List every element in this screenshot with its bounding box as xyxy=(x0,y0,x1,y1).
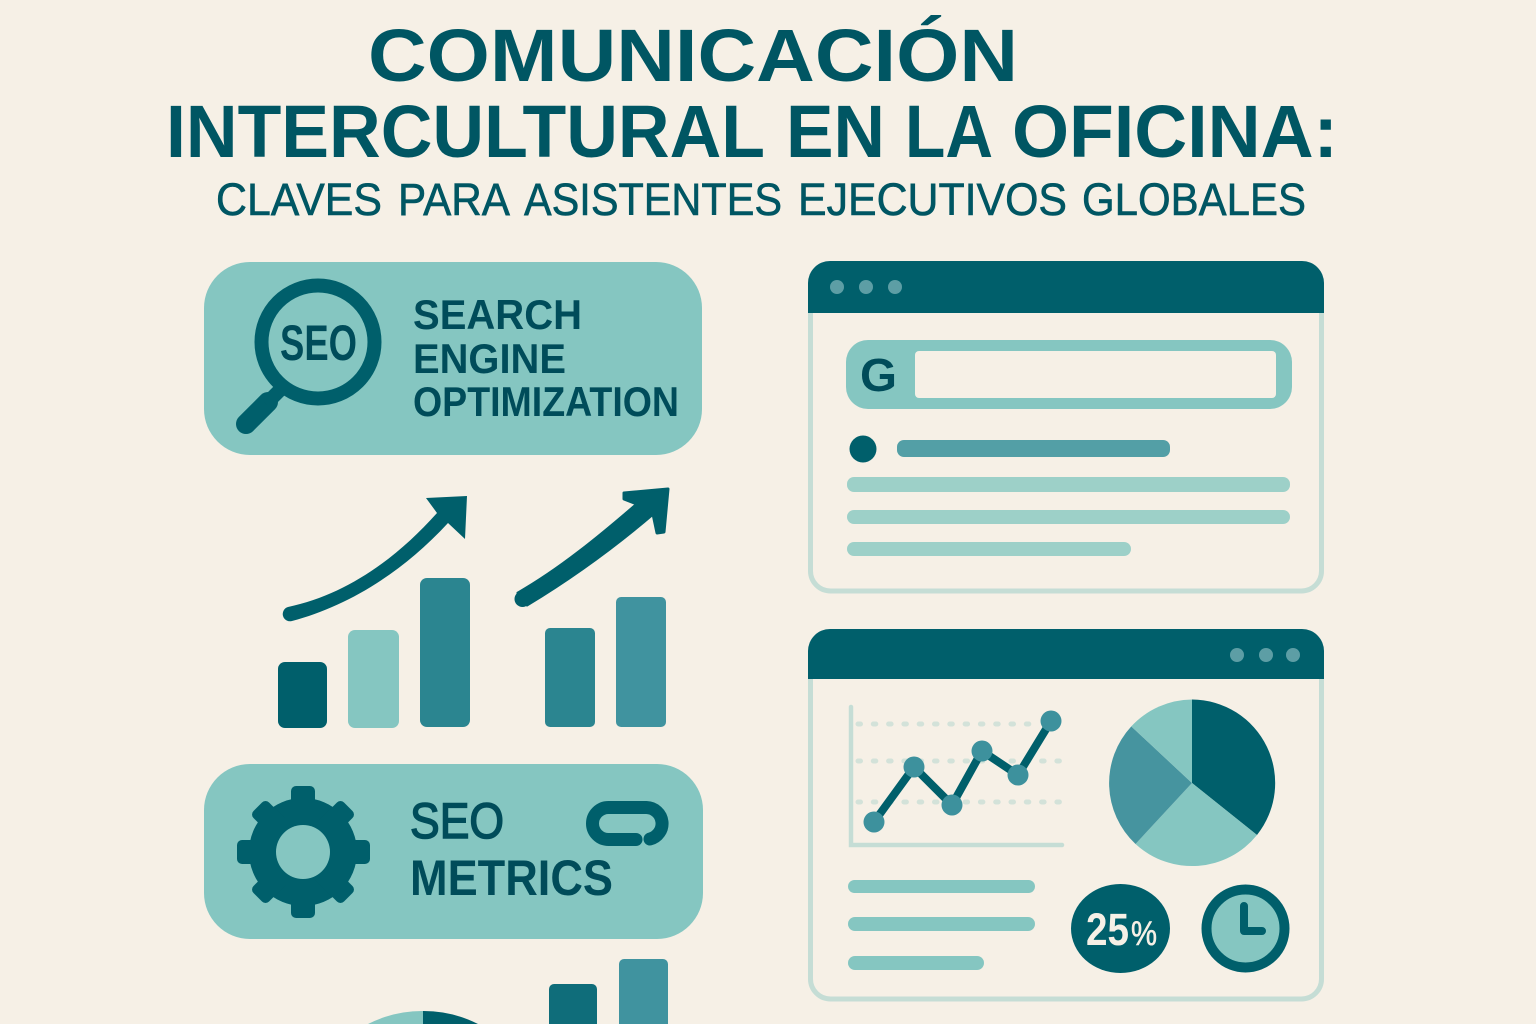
search bar xyxy=(846,340,1292,409)
search result lines xyxy=(847,436,1290,556)
panel: browser analytics window xyxy=(808,629,1324,999)
badge: 25 percent xyxy=(1071,884,1170,973)
icon: clock xyxy=(1206,890,1284,968)
arrow: right growth xyxy=(514,489,668,607)
browser header xyxy=(808,261,1324,313)
icon: magnifying glass with SEO xyxy=(246,286,374,424)
panel: SEO metrics xyxy=(204,764,703,939)
line chart xyxy=(851,707,1062,845)
title line 1: COMUNICACIÓN xyxy=(368,14,1018,97)
panel text: METRICS xyxy=(410,850,613,906)
icon: gear xyxy=(237,786,370,918)
title block xyxy=(166,14,1338,225)
browser header xyxy=(808,629,1324,679)
subtitle: EJECUTIVOS xyxy=(798,174,1067,225)
pie chart xyxy=(1109,700,1275,866)
title line 2: OFICINA: xyxy=(1012,90,1338,173)
text placeholder lines xyxy=(848,880,1035,970)
arrow: left growth xyxy=(283,496,467,621)
panel: browser search window xyxy=(808,261,1324,591)
subtitle xyxy=(216,174,1306,225)
title line 2: LA xyxy=(905,90,993,173)
panel text: SEO xyxy=(410,793,504,849)
subtitle: GLOBALES xyxy=(1082,174,1306,225)
title line 2: EN xyxy=(786,90,885,173)
panel text xyxy=(410,793,613,906)
panel text xyxy=(413,291,679,425)
badge: 25 percent: 25 xyxy=(1086,904,1129,955)
icon: magnifying glass with SEO: SEO xyxy=(280,315,357,371)
panel text: OPTIMIZATION xyxy=(413,378,679,425)
partial pie and bars at bottom edge xyxy=(368,959,668,1024)
search bar: G xyxy=(860,349,897,401)
subtitle: CLAVES xyxy=(216,174,382,225)
bar chart with growth arrows xyxy=(278,489,668,728)
panel: search engine optimization xyxy=(204,262,702,455)
title line 2 xyxy=(166,90,1338,173)
panel text: SEARCH xyxy=(413,291,582,338)
subtitle: ASISTENTES xyxy=(524,174,782,225)
title line 2: INTERCULTURAL xyxy=(166,90,765,173)
panel text: ENGINE xyxy=(413,335,566,382)
subtitle: PARA xyxy=(398,174,510,225)
icon: link xyxy=(592,808,662,840)
badge: 25 percent: % xyxy=(1131,915,1157,953)
